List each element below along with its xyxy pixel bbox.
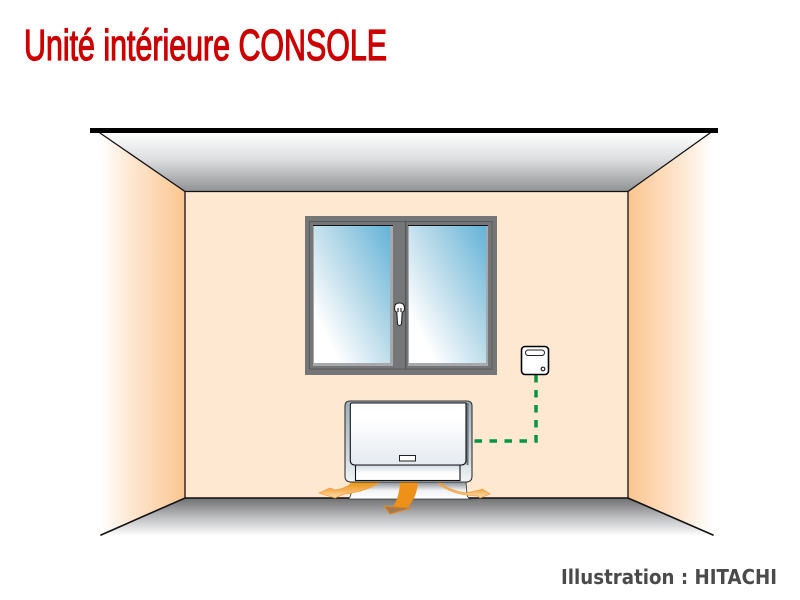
display slot bbox=[400, 456, 416, 461]
window handle bbox=[394, 303, 404, 326]
credit: Illustration : HITACHI bbox=[561, 565, 777, 589]
front panel bbox=[350, 403, 466, 465]
right wall bbox=[628, 133, 713, 535]
airflow arrow left bbox=[319, 482, 380, 498]
window bbox=[305, 216, 497, 375]
left pane bbox=[313, 225, 393, 366]
unit body bbox=[345, 401, 472, 482]
floor base bbox=[348, 482, 470, 499]
back wall bbox=[185, 191, 628, 498]
wall controller bbox=[522, 346, 548, 374]
floor bbox=[101, 498, 713, 535]
airflow arrow right bbox=[437, 482, 490, 498]
title: Unité intérieure CONSOLE bbox=[24, 21, 387, 70]
room edge lines bbox=[100, 133, 713, 535]
lower grille bbox=[356, 465, 460, 480]
console unit bbox=[319, 401, 490, 514]
room illustration bbox=[90, 128, 718, 535]
left wall bbox=[100, 133, 185, 535]
right pane bbox=[408, 225, 488, 366]
ceiling bar bbox=[90, 128, 718, 133]
airflow arrow center bbox=[384, 482, 418, 514]
dashed control cable bbox=[473, 375, 536, 441]
ceiling bbox=[100, 133, 710, 192]
